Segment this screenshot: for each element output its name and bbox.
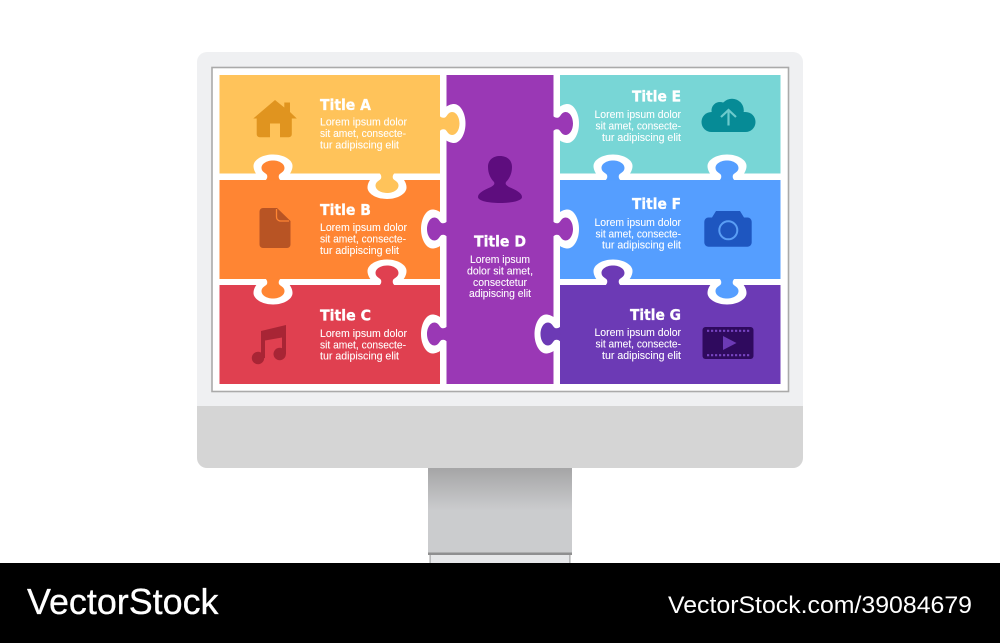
- panel: E: [560, 75, 780, 174]
- panel: G: [560, 285, 780, 384]
- text block: Title A: tur adipiscing elit: [320, 140, 399, 152]
- text block: Title D: Title D: [474, 233, 526, 251]
- panel: D: [446, 75, 554, 384]
- text block: Title A: Lorem ipsum dolor: [320, 117, 407, 129]
- panel: F: [560, 180, 780, 279]
- puzzle connectors: [254, 104, 746, 354]
- text block: Title B: tur adipiscing elit: [320, 245, 399, 257]
- image url: VectorStock.com/39084679: [668, 592, 972, 619]
- brand name: VectorStock: [27, 581, 219, 622]
- text block: Title G: tur adipiscing elit: [602, 350, 681, 362]
- text block: Title D: Lorem ipsum: [470, 254, 530, 266]
- text block: Title D: dolor sit amet,: [467, 265, 533, 277]
- text block: Title D: consectetur: [473, 277, 527, 289]
- text block: Title C: Title C: [320, 307, 371, 325]
- text block: Title C: sit amet, consecte-: [320, 340, 406, 352]
- text block: Title B: Lorem ipsum dolor: [320, 222, 407, 234]
- text block: Title F: [594, 195, 681, 252]
- text block: Title E: [594, 88, 681, 144]
- puzzle panels: [220, 75, 780, 384]
- icon: camera: [704, 211, 752, 247]
- text block: Title C: [320, 307, 407, 363]
- icon: person: [478, 156, 522, 203]
- text block: Title F: Title F: [632, 195, 681, 213]
- text block: Title F: sit amet, consecte-: [596, 228, 681, 240]
- text block: Title C: Lorem ipsum dolor: [320, 328, 407, 340]
- text block: Title A: sit amet, consecte-: [320, 128, 406, 140]
- text block: Title D: [467, 233, 533, 300]
- text block: Title G: [594, 306, 681, 362]
- monitor stand: [428, 468, 572, 563]
- screen: [212, 68, 788, 392]
- panel: C: [220, 285, 440, 384]
- text block: Title E: tur adipiscing elit: [602, 132, 681, 144]
- text block: Title G: sit amet, consecte-: [596, 338, 681, 350]
- text block: Title E: sit amet, consecte-: [596, 120, 681, 132]
- text block: Title B: [320, 201, 407, 257]
- text block: Title B: sit amet, consecte-: [320, 234, 406, 246]
- text block: Title D: adipiscing elit: [469, 288, 531, 300]
- watermark bar: [0, 563, 1000, 643]
- monitor body: [197, 52, 803, 468]
- panel: A: [220, 75, 440, 174]
- text block: Title A: Title A: [320, 96, 371, 114]
- text block: Title C: tur adipiscing elit: [320, 351, 399, 363]
- icon: video film: [702, 327, 754, 359]
- text block: Title A: [320, 96, 407, 152]
- text block: Title E: Title E: [632, 88, 681, 106]
- text block: Title B: Title B: [320, 201, 371, 219]
- panel: B: [220, 180, 440, 279]
- icon: cloud upload: [702, 99, 756, 132]
- text block: Title G: Title G: [630, 306, 681, 324]
- text block: Title F: tur adipiscing elit: [602, 240, 681, 252]
- text block: Title G: Lorem ipsum dolor: [594, 327, 681, 339]
- icon: music note: [252, 325, 286, 364]
- icon: document: [260, 208, 290, 248]
- text block: Title F: Lorem ipsum dolor: [594, 217, 681, 229]
- text block: Title E: Lorem ipsum dolor: [594, 109, 681, 121]
- icon: house: [253, 100, 297, 137]
